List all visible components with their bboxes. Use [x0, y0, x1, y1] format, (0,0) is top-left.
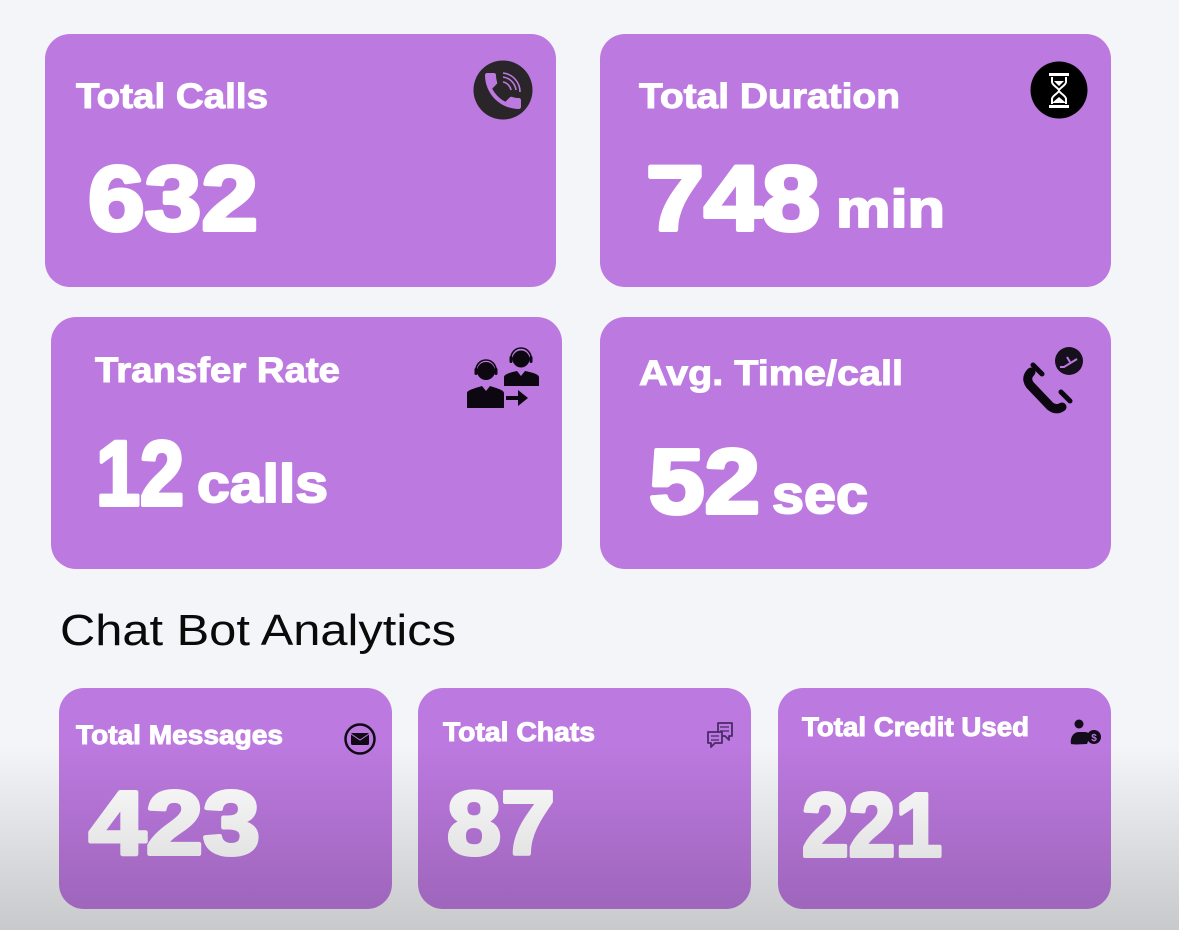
value: 12 calls [96, 423, 328, 525]
icon: chat bubbles [708, 723, 732, 747]
value: 748 min: min [836, 180, 945, 239]
value: 632: 632 [88, 148, 258, 250]
section heading: chat bot analytics: Chat Bot Analytics [60, 606, 456, 655]
value: 52 sec: 52 [649, 431, 760, 533]
heading: total chats: Total Chats [443, 717, 595, 747]
panel: total duration [600, 34, 1111, 287]
panel: average time per call [600, 317, 1111, 569]
bottom shadow fade [0, 745, 1179, 930]
value: 748 min [646, 148, 945, 250]
panel: total chats [418, 688, 751, 909]
value: 87: 87 [447, 774, 555, 874]
value: 748 min: 748 [646, 148, 820, 250]
value: 221: 221 [802, 776, 942, 876]
icon: user with coin [1071, 720, 1101, 744]
value: 52 sec [649, 431, 868, 533]
heading: total duration: Total Duration [639, 77, 900, 116]
heading: total messages: Total Messages [76, 720, 283, 750]
value: 423: 423 [89, 774, 260, 874]
panel: transfer rate [51, 317, 562, 569]
panel: total credit used [778, 688, 1111, 909]
icon: user with coin: $ [1091, 733, 1097, 744]
icon: phone call [474, 60, 532, 120]
value: 52 sec: sec [772, 465, 868, 525]
panel: total calls [45, 34, 556, 287]
value: 12 calls: calls [197, 454, 328, 514]
panel: total messages [59, 688, 392, 909]
heading: total calls: Total Calls [76, 77, 268, 116]
icon: agents transfer [467, 348, 539, 408]
icon: phone with clock [1028, 347, 1083, 409]
heading: total credit used: Total Credit Used [802, 712, 1029, 742]
heading: transfer rate: Transfer Rate [95, 351, 340, 390]
icon: envelope [346, 724, 374, 754]
icon: hourglass [1030, 62, 1088, 118]
value: 12 calls: 12 [96, 423, 184, 525]
heading: average time per call: Avg. Time/call [639, 354, 903, 393]
